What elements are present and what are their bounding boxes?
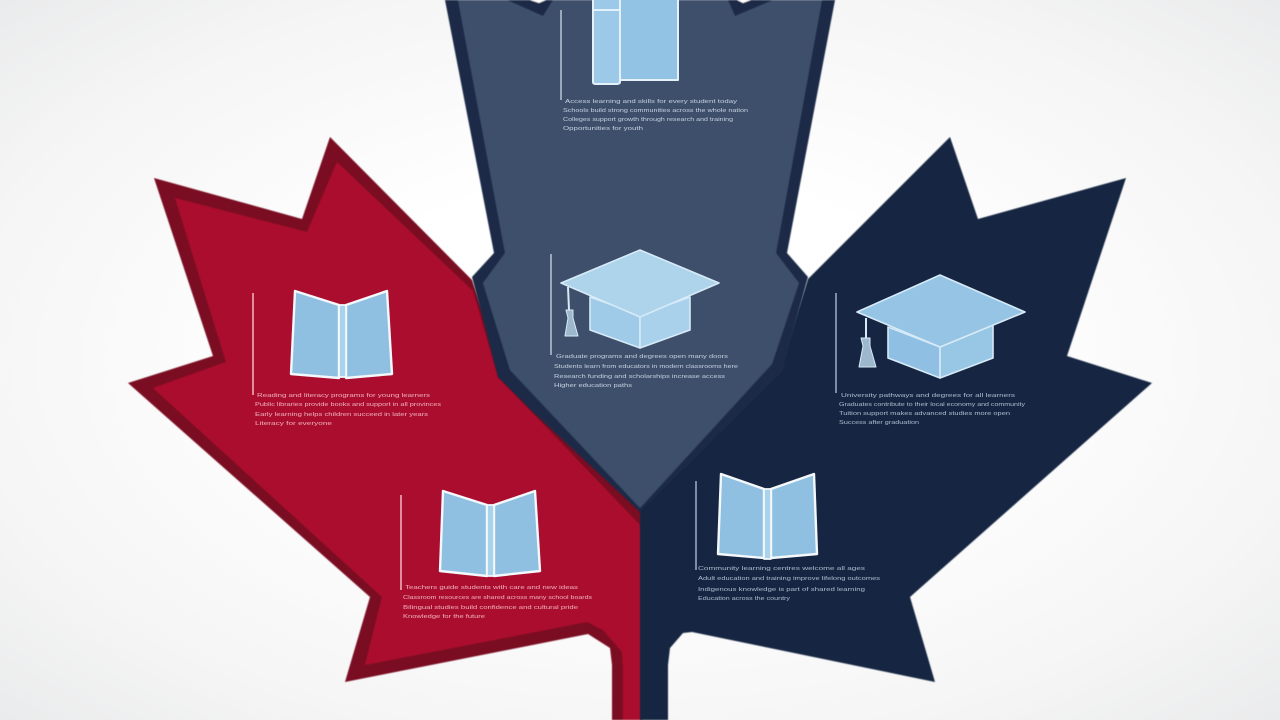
icon: graduation cap [857,275,1025,378]
block: top centre book [561,0,748,132]
text block: Adult education and training improve lifelong outcomes [698,576,880,582]
text block: Access learning and skills for every student today [565,99,737,105]
icon: open book [291,291,392,378]
text block: Public libraries provide books and support in all provinces [255,402,441,408]
text block: University pathways and degrees for all learners [841,393,1015,399]
rule [835,293,837,393]
text block [698,566,880,602]
text block: Indigenous knowledge is part of shared learning [698,587,865,593]
text block: Higher education paths [554,383,632,389]
text block: Education across the country [698,596,790,602]
text block: Research funding and scholarships increase access [554,374,725,380]
text block: Classroom resources are shared across many school boards [403,595,592,601]
rule [252,293,254,395]
rule [400,495,402,590]
text block: Early learning helps children succeed in later years [255,412,428,418]
icon: folded book [593,0,678,84]
block: red lower book [401,491,592,620]
text block: Success after graduation [839,420,919,426]
icon: graduation cap [561,250,719,348]
text block: Graduates contribute to their local economy and community [839,402,1025,408]
text block: Knowledge for the future [403,614,485,620]
text block: Community learning centres welcome all ages [698,566,865,572]
text block: Literacy for everyone [255,421,332,427]
text block [563,99,748,132]
text block [403,585,592,620]
text block: Teachers guide students with care and new ideas [405,585,578,591]
text block: Opportunities for youth [563,126,643,132]
text block: Reading and literacy programs for young learners [257,393,430,399]
block: centre graduation cap [551,250,738,389]
block: navy graduation cap [836,275,1025,426]
text block: Bilingual studies build confidence and cultural pride [403,605,578,611]
text block: Students learn from educators in modern classrooms here [554,364,738,370]
text block [554,354,738,389]
text block: Schools build strong communities across the whole nation [563,108,748,114]
icon: open book [440,491,540,576]
text block: Tuition support makes advanced studies more open [839,411,1010,417]
rule [560,10,562,100]
text block: Graduate programs and degrees open many doors [556,354,728,360]
icon: open book [718,474,817,559]
block: navy lower book [696,474,880,602]
top-right notch [728,0,773,16]
rule [695,481,697,570]
panel: slate centre lobe [445,0,835,512]
rule [550,254,552,355]
panel: navy right lobe [640,137,1152,720]
text block [839,393,1025,426]
top-left notch [507,0,553,16]
block: red upper book [253,291,441,427]
panel: red left lobe [128,137,642,720]
text block [255,393,441,427]
text block: Colleges support growth through research and training [563,117,733,123]
